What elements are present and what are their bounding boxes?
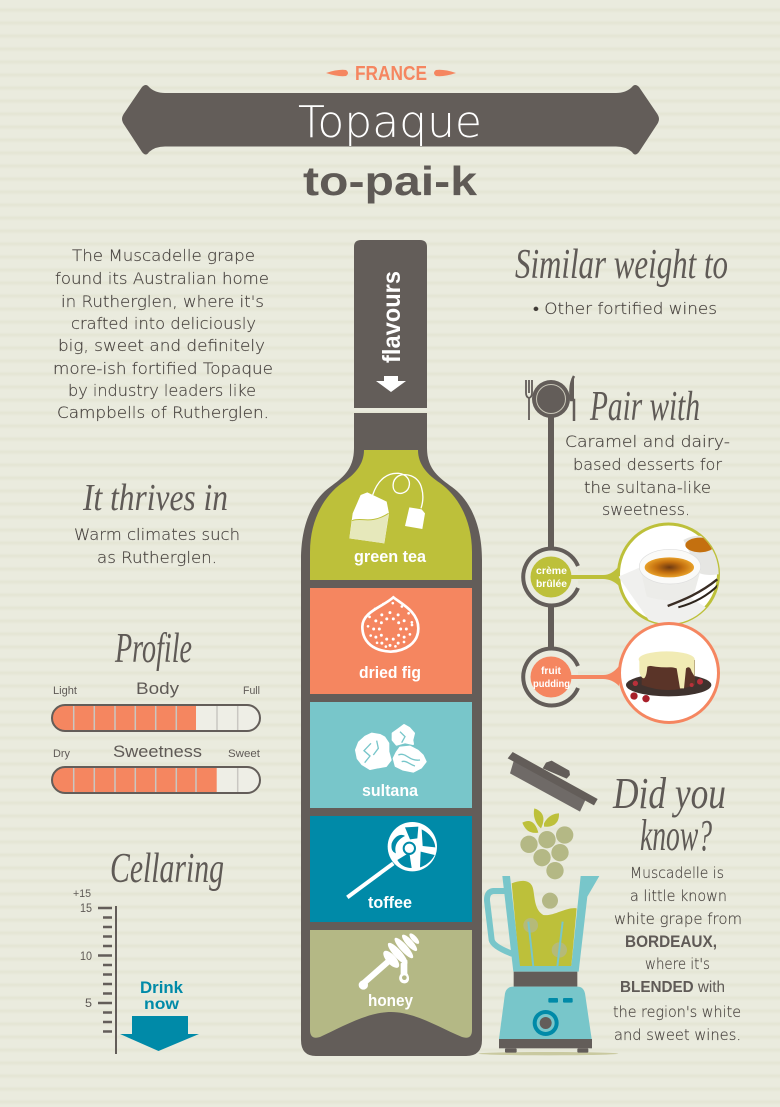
blender jug bbox=[487, 876, 599, 972]
panel: it thrives in: Warm climates such bbox=[74, 525, 240, 544]
panel: it thrives in: as Rutherglen. bbox=[97, 548, 217, 567]
title banner bbox=[122, 85, 659, 154]
pairing: fruit pudding: pudding bbox=[533, 679, 570, 690]
panel: it thrives in: It thrives in bbox=[82, 477, 228, 519]
text block: introduction: crafted into deliciously bbox=[71, 314, 256, 333]
illustration: blender bbox=[478, 752, 618, 1055]
heading: did you know: Did you bbox=[612, 769, 726, 818]
drink now arrow: now bbox=[144, 996, 180, 1013]
pair description: the sultana-like bbox=[584, 478, 711, 497]
did you know text: BORDEAUX, bbox=[625, 932, 717, 951]
wine bottle bbox=[301, 240, 482, 1056]
did you know text bbox=[613, 864, 742, 1044]
icon: plate and cutlery bbox=[526, 376, 574, 421]
blender lid bbox=[508, 752, 598, 812]
did you know text: where it's bbox=[645, 955, 710, 973]
ground shadow bbox=[478, 1052, 618, 1055]
pair description: based desserts for bbox=[573, 455, 722, 474]
heading: profile: Profile bbox=[114, 626, 192, 672]
cellaring scale: 10 bbox=[80, 949, 92, 963]
sweetness scale: Sweetness bbox=[113, 742, 202, 761]
panel: it thrives in bbox=[74, 477, 240, 567]
text block: introduction: in Rutherglen, where it's bbox=[61, 292, 264, 311]
flavour: honey bbox=[310, 926, 472, 1038]
sweetness scale: Sweet bbox=[228, 748, 260, 760]
text block: introduction: The Muscadelle grape bbox=[72, 246, 255, 265]
did you know text: the region's white bbox=[613, 1003, 741, 1021]
pairing: creme brulee bbox=[523, 524, 723, 627]
body scale: Body bbox=[136, 679, 180, 698]
panel: did you know bbox=[612, 769, 742, 1044]
panel: did you know: know? bbox=[640, 811, 712, 860]
drink now arrow bbox=[120, 978, 199, 1051]
pairing: creme brulee: brûlée bbox=[536, 579, 567, 590]
text block: introduction: Campbells of Rutherglen. bbox=[57, 403, 269, 422]
flavour: toffee: toffee bbox=[368, 893, 412, 912]
text block: introduction: more-ish fortified Topaque bbox=[53, 359, 273, 378]
flavour: dried fig bbox=[310, 588, 472, 694]
text block: introduction: big, sweet and definitely bbox=[58, 336, 265, 355]
did you know text: white grape from bbox=[614, 910, 742, 928]
bottle neck label: flavours bbox=[378, 271, 406, 363]
panel: profile bbox=[52, 626, 260, 793]
panel: cellaring bbox=[73, 846, 224, 1054]
bottle neck label bbox=[354, 240, 427, 408]
cellaring scale: 15 bbox=[80, 901, 92, 915]
did you know text: and sweet wines. bbox=[614, 1026, 741, 1044]
title banner: Topaque bbox=[298, 97, 482, 148]
body scale bbox=[52, 679, 260, 731]
drink now arrow: Drink bbox=[140, 978, 184, 997]
flavour: dried fig: dried fig bbox=[359, 663, 421, 682]
did you know text: Muscadelle is bbox=[630, 864, 724, 882]
text block: introduction: found its Australian home bbox=[55, 269, 269, 288]
flavour: sultana bbox=[310, 702, 472, 808]
pair description bbox=[565, 432, 730, 519]
text block: introduction: by industry leaders like bbox=[68, 381, 256, 400]
cellaring scale: +15 bbox=[73, 888, 91, 900]
body scale: Full bbox=[243, 685, 260, 697]
pairing: fruit pudding bbox=[521, 622, 720, 724]
pair description: sweetness. bbox=[602, 500, 690, 519]
flavour: honey: honey bbox=[368, 991, 413, 1010]
text block: introduction bbox=[53, 246, 273, 422]
sweetness scale: Dry bbox=[53, 748, 70, 760]
sweetness scale bbox=[52, 742, 260, 793]
pairing: creme brulee: crème bbox=[536, 566, 567, 577]
heading: country bbox=[326, 63, 456, 85]
heading: country: FRANCE bbox=[355, 63, 427, 85]
pairing: fruit pudding: fruit bbox=[541, 666, 562, 677]
cellaring scale bbox=[73, 888, 116, 1054]
did you know text: BLENDED with bbox=[620, 979, 725, 996]
panel: pair with bbox=[523, 376, 730, 722]
grapes bbox=[520, 808, 573, 909]
panel: similar weight bbox=[515, 242, 728, 318]
bottle body bbox=[301, 413, 482, 1056]
flavour: toffee bbox=[310, 816, 472, 922]
body scale: Light bbox=[53, 685, 77, 697]
heading: cellaring: Cellaring bbox=[110, 846, 224, 892]
flavour: sultana: sultana bbox=[362, 781, 418, 800]
pronunciation: to-pai-k bbox=[303, 158, 477, 204]
did you know text: a little known bbox=[630, 887, 727, 905]
heading: pair with: Pair with bbox=[589, 384, 700, 430]
flavour: green tea: green tea bbox=[354, 547, 427, 566]
pair description: Caramel and dairy- bbox=[565, 432, 730, 451]
cellaring scale: 5 bbox=[85, 996, 92, 1010]
panel: similar weight: • Other fortified wines bbox=[533, 299, 717, 318]
timeline line bbox=[548, 410, 554, 677]
blender base bbox=[499, 972, 592, 1053]
flavour: green tea bbox=[310, 450, 472, 580]
